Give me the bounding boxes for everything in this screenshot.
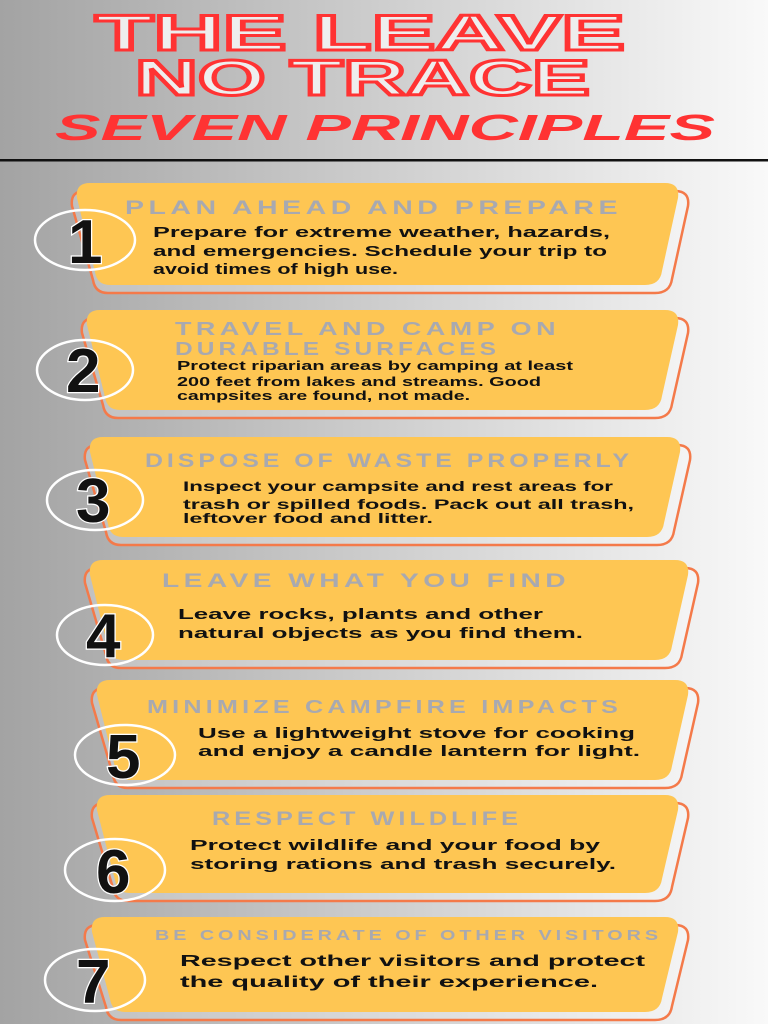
number 2: 2 (66, 337, 100, 406)
heading 2: TRAVEL AND CAMP ON (175, 319, 560, 339)
number 1 (35, 208, 135, 277)
body 1: and emergencies. Schedule your trip to (153, 243, 607, 260)
body 3: leftover food and litter. (183, 511, 433, 526)
heading 6: RESPECT WILDLIFE (212, 809, 522, 830)
body 5 (198, 725, 640, 760)
title: THE LEAVE (95, 5, 625, 61)
title: NO TRACE (135, 50, 590, 106)
subtitle: SEVEN PRINCIPLES (55, 107, 715, 148)
heading 4: LEAVE WHAT YOU FIND (162, 571, 570, 592)
card 5 (75, 680, 698, 792)
body 2: 200 feet from lakes and streams. Good (177, 375, 541, 389)
heading 2 (175, 319, 560, 359)
body 3 (183, 479, 634, 526)
body 6: Protect wildlife and your food by (190, 837, 601, 854)
card 2 (37, 310, 688, 418)
body 7: Respect other visitors and protect (180, 953, 646, 970)
body 1 (153, 224, 610, 278)
body 5: and enjoy a candle lantern for light. (198, 743, 640, 760)
number 3 (47, 467, 143, 536)
number 2 (37, 337, 133, 406)
body 3: trash or spilled foods. Pack out all trash, (183, 497, 634, 512)
card 1 (35, 183, 688, 293)
number 5 (75, 723, 175, 792)
body 3: Inspect your campsite and rest areas for (183, 479, 614, 494)
body 1: Prepare for extreme weather, hazards, (153, 224, 610, 241)
body 2: Protect riparian areas by camping at least (177, 359, 574, 373)
number 1: 1 (68, 208, 102, 277)
body 4: natural objects as you find them. (178, 625, 583, 642)
body 7 (180, 953, 646, 991)
card 4 (57, 560, 698, 671)
body 4 (178, 606, 583, 642)
heading 3: DISPOSE OF WASTE PROPERLY (145, 451, 633, 472)
heading 5: MINIMIZE CAMPFIRE IMPACTS (147, 697, 622, 717)
heading 2: DURABLE SURFACES (175, 339, 500, 359)
body 2: campsites are found, not made. (177, 389, 470, 403)
card 3 (47, 437, 690, 545)
body 6: storing rations and trash securely. (190, 856, 616, 873)
body 1: avoid times of high use. (153, 261, 398, 278)
number 5: 5 (106, 723, 140, 792)
body 5: Use a lightweight stove for cooking (198, 725, 635, 742)
body 6 (190, 837, 616, 873)
body 4: Leave rocks, plants and other (178, 606, 543, 623)
number 4 (57, 602, 153, 671)
number 6: 6 (96, 838, 130, 907)
number 4: 4 (86, 602, 121, 671)
number 3: 3 (76, 467, 110, 536)
body 7: the quality of their experience. (180, 974, 598, 991)
card 6 (65, 795, 688, 907)
number 7: 7 (76, 948, 110, 1017)
body 2 (177, 359, 574, 403)
number 6 (65, 838, 165, 907)
title (95, 5, 625, 106)
heading 7: BE CONSIDERATE OF OTHER VISITORS (155, 927, 662, 944)
number 7 (45, 948, 145, 1017)
heading 1: PLAN AHEAD AND PREPARE (125, 198, 622, 219)
card 7 (45, 917, 688, 1020)
